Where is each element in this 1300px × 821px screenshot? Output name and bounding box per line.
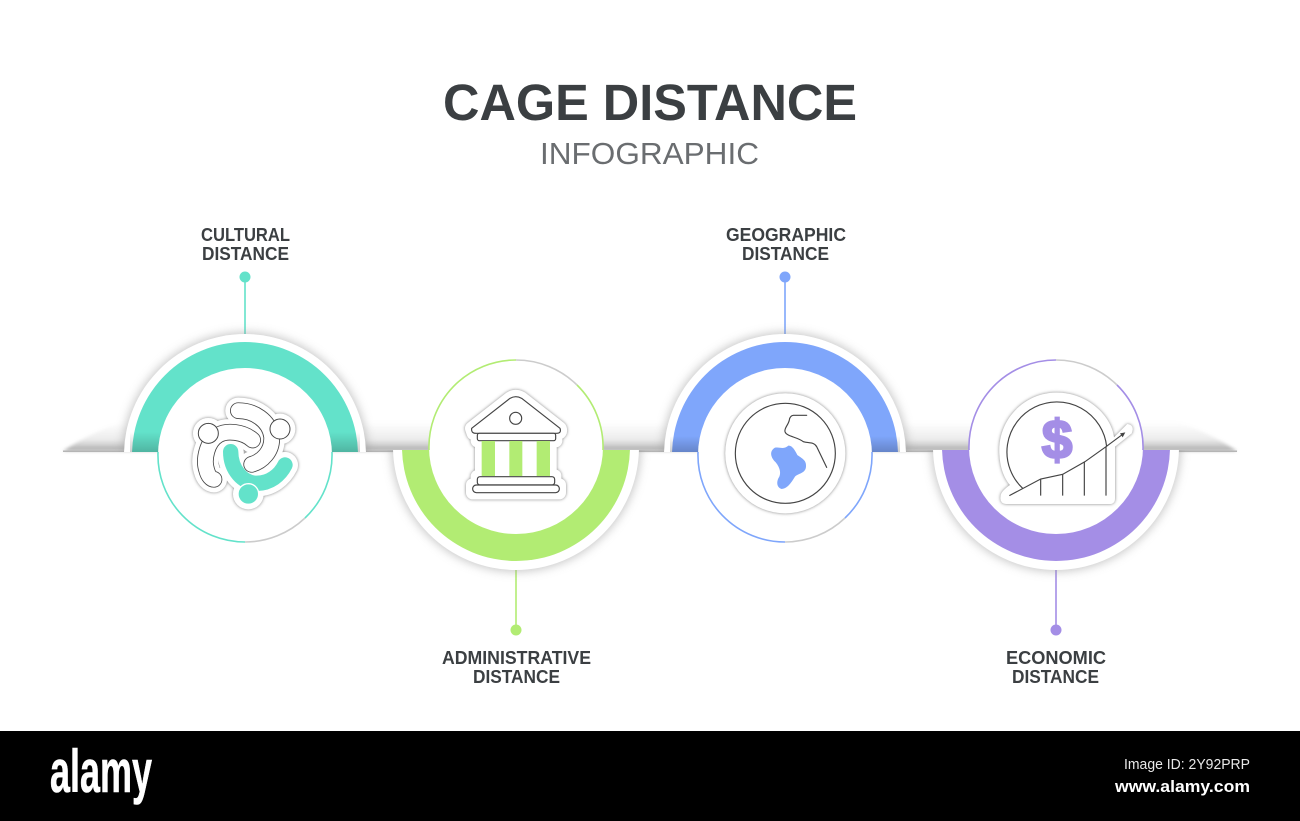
panel: cultural distance bbox=[123, 225, 367, 577]
coloured arc bbox=[670, 342, 900, 452]
panel: administrative distance bbox=[392, 323, 640, 687]
connector: geographic bbox=[780, 272, 790, 334]
connector: cultural bbox=[240, 272, 250, 334]
inner white disc with thin ring bbox=[969, 360, 1143, 534]
inner white disc with thin ring bbox=[429, 360, 603, 534]
outer white half disc bbox=[120, 328, 370, 452]
panel: economic distance bbox=[932, 323, 1180, 687]
title: CAGE DISTANCE bbox=[443, 74, 857, 131]
label: economic distance bbox=[1006, 648, 1106, 687]
outer white half disc bbox=[660, 328, 910, 452]
title: INFOGRAPHIC bbox=[540, 136, 759, 171]
icon: dollar coin with growth chart bbox=[999, 393, 1133, 504]
label: cultural distance: CULTURAL bbox=[201, 225, 290, 245]
label: economic distance: ECONOMIC bbox=[1006, 648, 1106, 668]
connector: administrative bbox=[510, 568, 522, 636]
label: administrative distance bbox=[442, 648, 591, 687]
outer white half disc bbox=[927, 450, 1185, 576]
connector: economic bbox=[1050, 568, 1062, 636]
icon: globe bbox=[725, 393, 845, 513]
icon: dollar coin with growth chart: $ bbox=[1042, 408, 1072, 470]
inner white disc with thin ring bbox=[158, 368, 332, 542]
label: cultural distance bbox=[201, 225, 290, 264]
title bbox=[443, 74, 857, 171]
shadow band and horizontal line bbox=[63, 422, 1237, 452]
label: administrative distance: ADMINISTRATIVE bbox=[442, 648, 591, 668]
website: www.alamy.com bbox=[1114, 777, 1250, 796]
inner white disc with thin ring bbox=[698, 368, 872, 542]
icon: people circle bbox=[193, 411, 295, 509]
label: economic distance: DISTANCE bbox=[1012, 667, 1099, 687]
label: geographic distance: DISTANCE bbox=[742, 244, 829, 264]
footer bar bbox=[0, 731, 1300, 821]
panel: geographic distance bbox=[663, 225, 907, 577]
label: administrative distance: DISTANCE bbox=[473, 667, 560, 687]
icon: bank building bbox=[472, 397, 560, 493]
label: cultural distance: DISTANCE bbox=[202, 244, 289, 264]
coloured arc bbox=[942, 450, 1170, 561]
logo: alamy: alamy bbox=[50, 738, 152, 805]
label: geographic distance: GEOGRAPHIC bbox=[726, 225, 846, 245]
coloured arc bbox=[402, 450, 630, 561]
outer white half disc bbox=[387, 450, 645, 576]
coloured arc bbox=[130, 342, 360, 452]
image id: Image ID: 2Y92PRP bbox=[1124, 756, 1250, 773]
label: geographic distance bbox=[726, 225, 846, 264]
